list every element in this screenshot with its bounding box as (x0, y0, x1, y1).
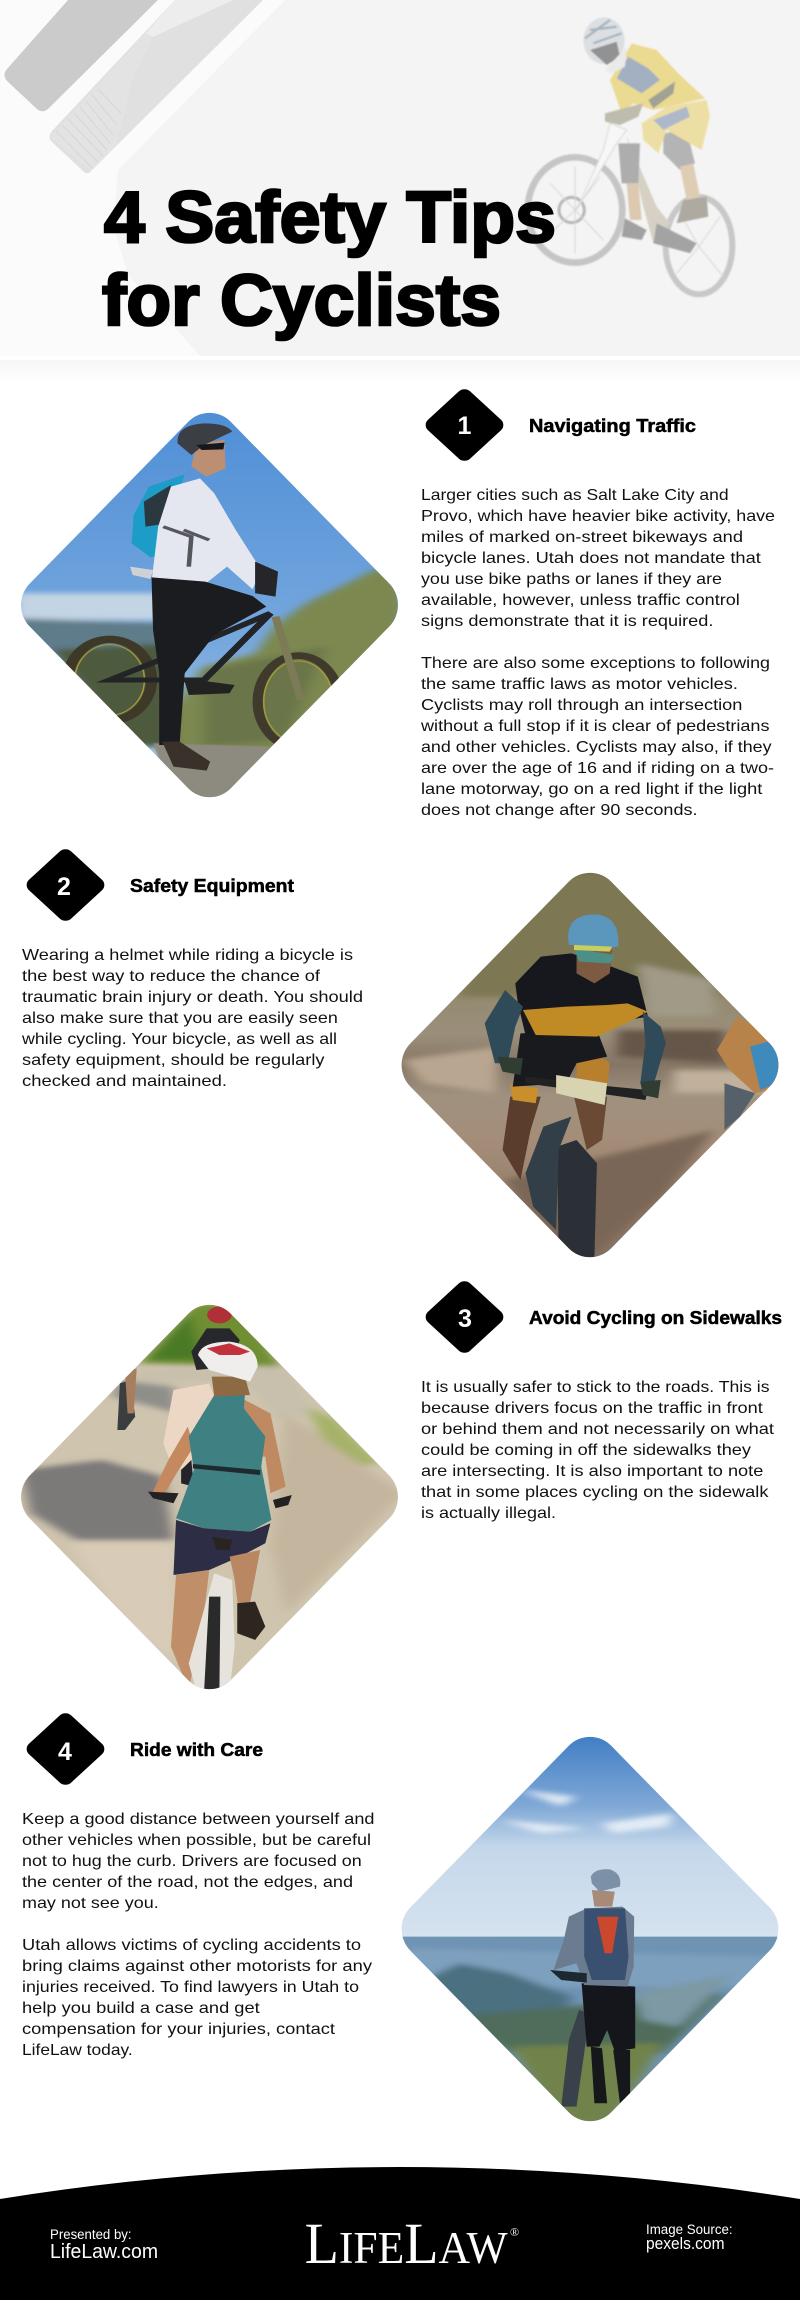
text block 2 (21, 947, 363, 1090)
text block 1 (420, 487, 775, 819)
text block 1: miles of marked on-street bikeways and (421, 529, 743, 546)
badge 3: 3 (458, 1305, 472, 1333)
heading 2: Safety Equipment (130, 876, 294, 896)
text block 4: the center of the road, not the edges, and (22, 1874, 353, 1891)
text block 1: There are also some exceptions to following (421, 655, 770, 672)
text block 4: Keep a good distance between yourself and (22, 1811, 375, 1828)
text block 3: because drivers focus on the traffic in front (421, 1400, 763, 1417)
text block 1: Cyclists may roll through an intersection (421, 697, 742, 714)
text block 4: bring claims against other motorists for any (22, 1958, 372, 1975)
image source (646, 2222, 733, 2253)
text block 2: Wearing a helmet while riding a bicycle is (22, 947, 353, 964)
text block 1: Provo, which have heavier bike activity, have (421, 508, 775, 525)
text block 1: and other vehicles. Cyclists may also, if they (421, 739, 772, 756)
text block 2: while cycling. Your bicycle, as well as all (21, 1031, 337, 1048)
badge 3 (422, 1278, 507, 1356)
text block 3: or behind them and not necessarily on what (421, 1421, 775, 1438)
text block 4: not to hug the curb. Drivers are focused on (22, 1853, 362, 1870)
badge 1: 1 (458, 412, 472, 440)
text block 1: Larger cities such as Salt Lake City and (421, 487, 729, 504)
text block 1: without a full stop if it is clear of pedestrians (420, 718, 770, 735)
text block 2: traumatic brain injury or death. You should (22, 989, 363, 1006)
title (102, 178, 556, 341)
presented by (50, 2227, 158, 2263)
presented by: LifeLaw.com (50, 2241, 158, 2263)
logo: ® (510, 2225, 519, 2239)
cyclist photo, faded (528, 17, 732, 294)
badge 2 (23, 846, 108, 924)
text block 3: is actually illegal. (421, 1505, 556, 1522)
text block 4: compensation for your injuries, contact (22, 2021, 336, 2038)
text block 3: It is usually safer to stick to the roads. This is (421, 1379, 770, 1396)
text block 2: the best way to reduce the chance of (22, 968, 321, 985)
badge 4 (23, 1710, 108, 1788)
text block 1: are over the age of 16 and if riding on a two- (421, 760, 774, 777)
text block 3: could be coming in off the sidewalks they (421, 1442, 751, 1459)
text block 3 (421, 1379, 775, 1522)
text block 4: other vehicles when possible, but be careful (22, 1832, 371, 1849)
text block 1: the same traffic laws as motor vehicles. (421, 676, 738, 693)
decorative slanted bar: line pattern (50, 0, 263, 174)
title: for Cyclists (102, 261, 501, 341)
text block 1: bicycle lanes. Utah does not mandate that (421, 550, 761, 567)
text block 2: also make sure that you are easily seen (22, 1010, 338, 1027)
text block 4: injuries received. To find lawyers in Utah to (22, 1979, 359, 1996)
image source: Image Source: (646, 2222, 733, 2237)
text block 1: you use bike paths or lanes if they are (421, 571, 722, 588)
text block 3: are intersecting. It is also important to note (421, 1463, 763, 1480)
text block 4 (22, 1811, 375, 2059)
text block 4: may not see you. (22, 1895, 159, 1912)
badge 1 (422, 386, 507, 464)
heading 1: Navigating Traffic (529, 416, 696, 436)
text block 1: available, however, unless traffic control (421, 592, 740, 609)
photo 1: cyclist on a hill under blue sky (10, 410, 408, 800)
photo 3: cyclists riding on a country road, seen from behind (10, 1300, 408, 1693)
badge 2: 2 (57, 873, 71, 901)
title: 4 Safety Tips (104, 178, 556, 258)
decorative slanted bar: solid grey (4, 0, 158, 111)
heading 4: Ride with Care (130, 1740, 263, 1760)
text block 3: that in some places cycling on the sidewalk (421, 1484, 770, 1501)
logo: LIFELAW (305, 2211, 508, 2276)
text block 1: does not change after 90 seconds. (421, 802, 698, 819)
text block 4: Utah allows victims of cycling accidents to (22, 1937, 361, 1954)
image source: pexels.com (646, 2235, 724, 2253)
photo 2: racer on a dirt track (398, 870, 786, 1260)
text block 4: LifeLaw today. (22, 2042, 133, 2059)
presented by: Presented by: (50, 2227, 132, 2242)
text block 2: safety equipment, should be regularly (22, 1052, 324, 1069)
text block 1: signs demonstrate that it is required. (421, 613, 713, 630)
header panel (0, 0, 800, 382)
text block 4: help you build a case and get (22, 2000, 260, 2017)
heading 3: Avoid Cycling on Sidewalks (529, 1308, 782, 1328)
text block 2: checked and maintained. (22, 1073, 227, 1090)
text block 1: lane motorway, go on a red light if the light (421, 781, 763, 798)
badge 4: 4 (58, 1738, 72, 1766)
photo 4: cyclist overlooking blue mountains (398, 1733, 786, 2123)
footer band (0, 2167, 800, 2300)
